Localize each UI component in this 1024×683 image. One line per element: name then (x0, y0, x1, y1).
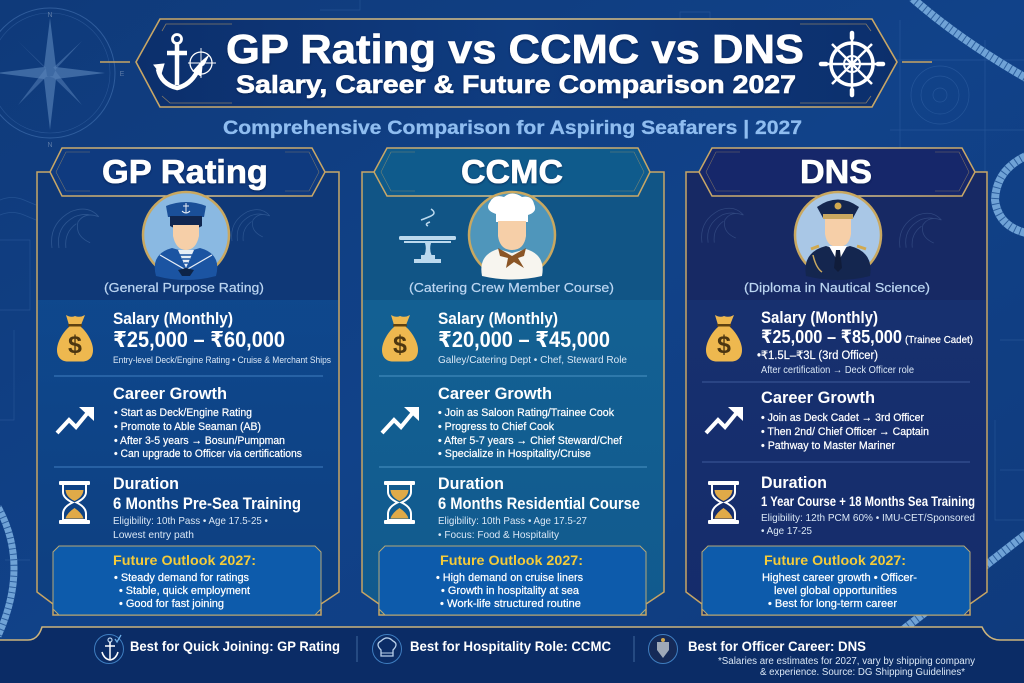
duration block: 6 Months Residential Course (438, 495, 640, 513)
duration block: Eligibility: 10th Pass • Age 17.5-27 (438, 515, 587, 527)
icon: ship wheel (821, 33, 883, 95)
rope: bottom left (0, 507, 14, 636)
future outlook box: • Good for fast joining (119, 598, 224, 610)
footer bar (0, 627, 1024, 683)
salary block: Salary (Monthly) (113, 310, 233, 328)
footnote: *Salaries are estimates for 2027, vary by shipping company (718, 656, 975, 667)
salary block: Salary (Monthly) (761, 309, 878, 327)
avatar: officer (795, 192, 881, 280)
duration block: Eligibility: 10th Pass • Age 17.5-25 • (113, 515, 268, 527)
duration block: Lowest entry path (113, 529, 194, 541)
salary block (757, 309, 973, 376)
duration block: 1 Year Course + 18 Months Sea Training (761, 493, 975, 509)
column heading (50, 148, 325, 196)
career growth block: • After 5-7 years → Chief Steward/Chef (438, 435, 623, 447)
career growth block: Career Growth (113, 384, 227, 403)
duration block: 6 Months Pre-Sea Training (113, 495, 301, 513)
column heading (699, 148, 975, 196)
future outlook box: level global opportunities (774, 585, 897, 597)
icon: anchor with compass (154, 34, 216, 88)
panel frame (686, 172, 987, 615)
compass rose: N (47, 142, 53, 149)
salary block: Entry-level Deck/Engine Rating • Cruise & Merchant Ships (113, 355, 331, 366)
icon: anchor badge (94, 634, 124, 664)
career growth block (438, 384, 623, 460)
career growth block: • Then 2nd/ Chief Officer → Captain (761, 426, 929, 438)
salary block: ₹25,000 – ₹60,000 (113, 327, 285, 352)
salary block: Salary (Monthly) (438, 310, 558, 328)
duration block (113, 475, 301, 541)
subtitle: (General Purpose Rating) (104, 280, 264, 295)
career growth block: • Join as Saloon Rating/Trainee Cook (438, 407, 614, 419)
icon: money bag (706, 315, 742, 362)
duration block (438, 475, 640, 541)
icon: money bag (57, 315, 93, 362)
icon: growth arrow (382, 407, 419, 433)
footer label: GP Rating: Best for Quick Joining: GP Rating (130, 638, 340, 654)
compass rose: E (120, 71, 125, 78)
career growth block: • Start as Deck/Engine Rating (114, 407, 252, 419)
compass rose (0, 8, 125, 149)
subtitle text: Salary, Career & Future Comparison 2027 (236, 71, 796, 99)
rope: right loop (995, 156, 1024, 233)
salary block: ₹20,000 – ₹45,000 (438, 327, 610, 352)
career growth block: • Specialize in Hospitality/Cruise (438, 448, 591, 460)
career growth block: • After 3-5 years → Bosun/Pumpman (114, 435, 285, 447)
panel frame (362, 172, 664, 615)
duration block: Duration (113, 475, 179, 493)
duration block: Eligibility: 12th PCM 60% • IMU-CET/Sponsored (761, 512, 975, 524)
icon: hourglass (59, 481, 90, 524)
future outlook box (702, 546, 970, 615)
salary block: ₹25,000 – ₹85,000 (761, 326, 902, 347)
panel upper band (363, 173, 663, 300)
future outlook box: • Work-life structured routine (440, 598, 581, 610)
panel upper band (38, 173, 338, 300)
future outlook box: • Growth in hospitality at sea (441, 585, 580, 597)
career growth block: Career Growth (761, 388, 875, 407)
duration block: Duration (438, 475, 504, 493)
panel: DNS (686, 148, 987, 615)
column heading (374, 148, 650, 196)
salary block (438, 310, 627, 366)
column heading: CCMC (461, 153, 563, 190)
icon: serving dish (399, 209, 456, 263)
icon: hourglass (708, 481, 739, 524)
icon: hourglass (384, 481, 415, 524)
future outlook box: Future Outlook 2027: (764, 552, 906, 568)
rope: top right (912, 0, 1024, 78)
duration block: • Age 17-25 (761, 525, 812, 537)
future outlook box (53, 546, 321, 615)
salary block (113, 310, 331, 366)
future outlook box: Highest career growth • Officer- (762, 572, 917, 584)
salary block: •₹1.5L–₹3L (3rd Officer) (757, 350, 878, 362)
footnote: & experience. Source: DG Shipping Guidelines* (760, 667, 965, 678)
panel: GP Rating (37, 148, 339, 615)
icon: growth arrow (706, 407, 743, 433)
career growth block (761, 388, 929, 452)
subtitle: (Diploma in Nautical Science) (744, 280, 930, 295)
title text (226, 26, 804, 99)
future outlook box: • Steady demand for ratings (114, 572, 249, 584)
footnote (718, 656, 975, 678)
icon: chef hat badge (372, 634, 402, 664)
future outlook box: • Best for long-term career (768, 598, 897, 610)
icon: officer badge (648, 634, 678, 664)
career growth block: • Can upgrade to Officer via certifications (114, 448, 302, 460)
rope: bottom right (900, 534, 1024, 632)
career growth block: • Promote to Able Seaman (AB) (114, 421, 261, 433)
icon: money bag (382, 315, 418, 362)
column heading: DNS (800, 153, 872, 190)
career growth block: • Pathway to Master Mariner (761, 440, 895, 452)
footer label: DNS: Best for Officer Career: DNS (688, 638, 866, 654)
salary block: After certification → Deck Officer role (761, 365, 914, 376)
title text: GP Rating vs CCMC vs DNS (226, 26, 804, 72)
future outlook box: Future Outlook 2027: (440, 552, 583, 568)
career growth block: • Join as Deck Cadet → 3rd Officer (761, 412, 924, 424)
panel frame (37, 172, 339, 615)
icon: growth arrow (57, 407, 94, 433)
career growth block: Career Growth (438, 384, 552, 403)
duration block: Duration (761, 474, 827, 492)
title banner (100, 19, 932, 107)
career growth block (113, 384, 302, 460)
avatar: sailor (143, 192, 229, 280)
tagline: Comprehensive Comparison for Aspiring Seafarers | 2027 (223, 117, 802, 139)
salary block: (Trainee Cadet) (905, 335, 973, 346)
footer label: CCMC: Best for Hospitality Role: CCMC (410, 638, 611, 654)
subtitle: (Catering Crew Member Course) (409, 280, 614, 295)
future outlook box (379, 546, 646, 615)
compass rose: N (47, 12, 53, 19)
duration block (761, 474, 975, 537)
panel upper band (687, 173, 986, 300)
career growth block: • Progress to Chief Cook (438, 421, 554, 433)
salary block: Galley/Catering Dept • Chef, Steward Role (438, 354, 627, 366)
panel: CCMC (362, 148, 664, 615)
future outlook box: • High demand on cruise liners (436, 572, 583, 584)
future outlook box: • Stable, quick employment (119, 585, 250, 597)
duration block: • Focus: Food & Hospitality (438, 529, 560, 541)
column heading: GP Rating (102, 153, 268, 190)
future outlook box: Future Outlook 2027: (113, 552, 256, 568)
avatar: chef (469, 192, 555, 280)
